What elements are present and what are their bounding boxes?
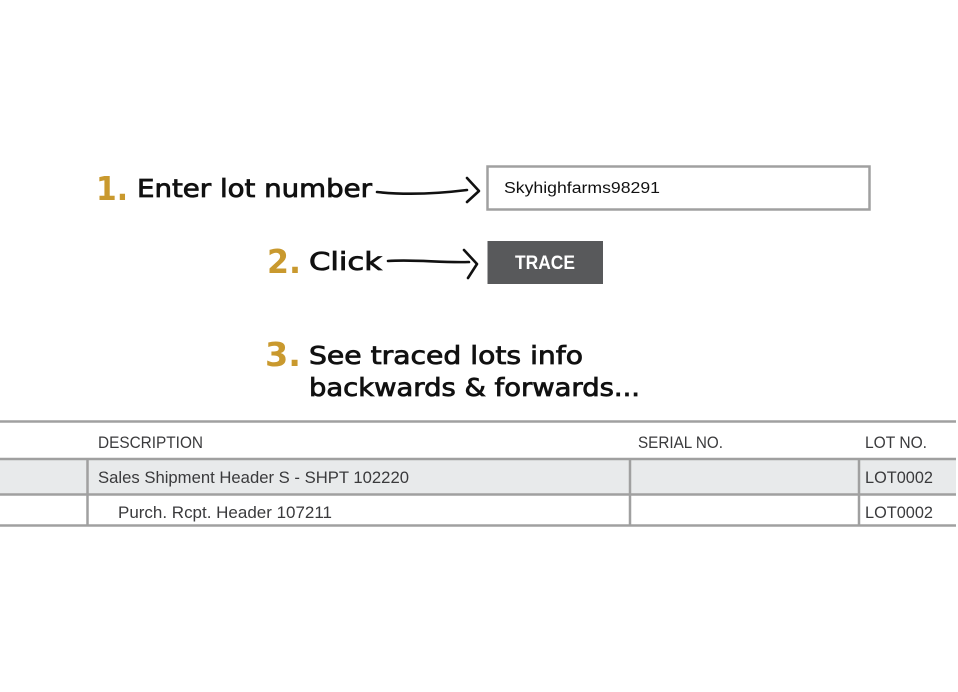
step 1 number: 1.	[96, 169, 128, 208]
lot number input: Skyhighfarms98291	[504, 180, 660, 197]
step 2: click trace	[267, 241, 603, 284]
arrow: to lot number input	[377, 178, 479, 202]
row: purchase receipt	[118, 503, 933, 522]
highlighted row background	[0, 459, 956, 494]
trace button: TRACE	[515, 253, 575, 274]
step 3 label: See traced lots info	[309, 341, 583, 370]
table header	[98, 433, 927, 452]
results table	[0, 422, 956, 526]
arrow: to trace button	[388, 250, 477, 278]
step 2 label: Click	[309, 247, 383, 276]
row: sales shipment: LOT0002	[865, 468, 933, 487]
table header: LOT NO.	[865, 433, 927, 452]
step 1: enter lot number	[96, 166, 870, 210]
lot number input	[488, 166, 870, 210]
table header: DESCRIPTION	[98, 433, 203, 452]
table header: SERIAL NO.	[638, 433, 723, 452]
step 3 label line two: backwards & forwards...	[309, 373, 640, 402]
row: sales shipment	[98, 468, 933, 487]
row: purchase receipt: Purch. Rcpt. Header 107211	[118, 503, 332, 522]
step 1 label: Enter lot number	[137, 174, 373, 203]
step 3: see traced lots	[265, 335, 640, 402]
step 3 number: 3.	[265, 335, 301, 374]
row: sales shipment: Sales Shipment Header S - SHPT 102220	[98, 468, 409, 487]
step 2 number: 2.	[267, 242, 301, 281]
trace button	[488, 241, 603, 284]
row: purchase receipt: LOT0002	[865, 503, 933, 522]
